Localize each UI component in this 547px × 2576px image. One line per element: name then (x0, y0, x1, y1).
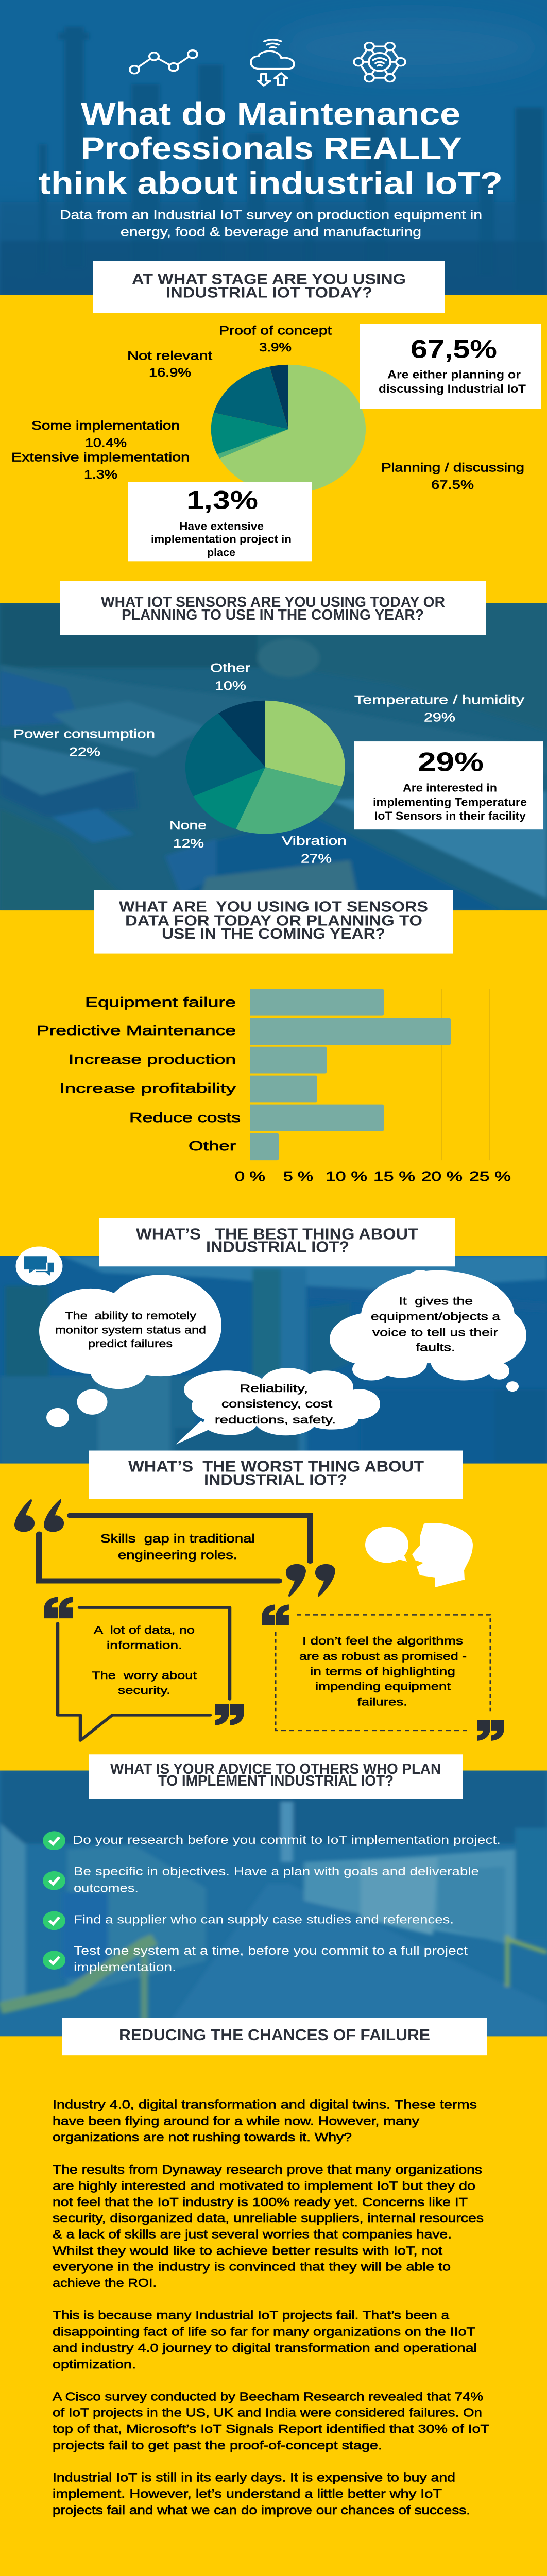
heading: sensor data use: DATA FOR TODAY OR PLANNING TO (125, 912, 422, 929)
pie labels: stage of use: 10.4% (85, 436, 127, 450)
paragraph 4: projects fail to get past the proof-of-concept stage. (53, 2439, 382, 2452)
callout: 1,3%: 1,3% (186, 485, 258, 514)
thought bubble: remote monitoring: predict failures (88, 1337, 173, 1350)
header icons (130, 40, 405, 86)
paragraph 2: everyone in the industry is convinced that they will be able to (53, 2260, 451, 2274)
paragraph 2: achieve the ROI. (53, 2277, 157, 2290)
heading: sensor data use (94, 890, 453, 954)
thought bubble: equipment voice: It gives the (399, 1295, 473, 1308)
paragraph 5 (53, 2471, 470, 2517)
quote: algorithms (262, 1604, 504, 1741)
heading: advice: WHAT IS YOUR ADVICE TO OTHERS WHO PLAN (110, 1761, 441, 1777)
pie labels: stage of use: 1.3% (84, 467, 117, 481)
callout: 67,5%: 67,5% (411, 334, 497, 363)
pie labels: IoT sensors: 27% (301, 852, 332, 866)
heading: sensor data use: WHAT ARE YOU USING IOT SENSORS (119, 899, 428, 915)
paragraph 2: are highly interested and motivated to implement IoT but they do (53, 2179, 475, 2193)
paragraph 2: & a lack of skills are just several worries that companies have. (53, 2228, 452, 2241)
item 1: Do your research before you commit to IoT implementation project. (73, 1834, 501, 1846)
quote: algorithms: in terms of highlighting (310, 1666, 455, 1678)
paragraph 4: A Cisco survey conducted by Beecham Research revealed that 74% (53, 2390, 483, 2403)
pie labels: stage of use: 16.9% (149, 365, 191, 380)
heading: advice: TO IMPLEMENT INDUSTRIAL IOT? (158, 1772, 394, 1789)
item 3: Find a supplier who can supply case studies and references. (74, 1913, 454, 1926)
callout: 67,5%: discussing Industrial IoT (379, 382, 526, 396)
callout: 29%: IoT Sensors in their facility (374, 809, 526, 822)
thought bubble: equipment voice: equipment/objects a (371, 1311, 501, 1323)
paragraph 2 (53, 2163, 484, 2290)
quote: data and security (44, 1597, 244, 1740)
axis labels: 20 % (421, 1169, 463, 1184)
quote: data and security: information. (107, 1639, 182, 1652)
pie labels: stage of use: 3.9% (259, 340, 292, 354)
quote: skills gap: Skills gap in traditional (100, 1532, 255, 1546)
heading: sensor data use: USE IN THE COMING YEAR? (162, 926, 385, 942)
pie labels: IoT sensors: 10% (215, 679, 246, 692)
callout: 1,3% (128, 482, 312, 561)
heading: best thing: INDUSTRIAL IOT? (206, 1239, 349, 1256)
subtitle: energy, food & beverage and manufacturing (121, 225, 421, 239)
item 3 (43, 1911, 454, 1930)
paragraph 1: have been flying around for a while now. However, many (53, 2114, 419, 2128)
quote: algorithms: are as robust as promised - (299, 1650, 467, 1663)
paragraph 5: implement. However, let’s understand a little better why IoT (53, 2487, 442, 2501)
title: Professionals REALLY (81, 131, 462, 166)
pie labels: IoT sensors: 12% (173, 836, 204, 851)
callout: 67,5%: Are either planning or (387, 368, 521, 381)
subtitle: Data from an Industrial IoT survey on production equipment in (60, 208, 482, 222)
thought bubble: equipment voice: faults. (416, 1342, 455, 1354)
paragraph 3: optimization. (53, 2358, 136, 2371)
speech bubble: reliability: Reliability, (240, 1382, 308, 1395)
heading: worst thing: INDUSTRIAL IOT? (204, 1471, 347, 1489)
section photo background: steel plant (0, 1256, 547, 1464)
paragraph 3: and industry 4.0 journey to digital transformation and operational (53, 2342, 477, 2355)
thought bubble: remote monitoring (39, 1275, 221, 1427)
axis labels: 10 % (326, 1169, 367, 1184)
pie labels: stage of use (11, 324, 524, 492)
quote: skills gap: engineering roles. (118, 1549, 237, 1562)
category labels (37, 995, 241, 1154)
callout: 67,5% (360, 324, 541, 409)
paragraph 5: projects fail and what we can do improve our chances of success. (53, 2504, 470, 2517)
pie chart: stage of use (211, 365, 366, 494)
pie labels: stage of use: Planning / discussing (381, 461, 524, 474)
paragraph 2: security, disorganized data, unreliable suppliers, internal resources (53, 2212, 484, 2225)
axis labels (235, 1169, 511, 1184)
item 4: implementation. (74, 1961, 176, 1974)
heading: stage of IIoT use: AT WHAT STAGE ARE YOU USING (132, 271, 406, 287)
speech bubble: reliability (176, 1368, 380, 1445)
icon: line chart (130, 50, 197, 74)
thought bubble: remote monitoring: monitor system status and (55, 1324, 206, 1336)
callout: 1,3%: Have extensive (179, 520, 264, 532)
item 2 (43, 1865, 479, 1895)
heading: IoT sensors (60, 581, 486, 635)
paragraph 1: organizations are not rushing towards it. Why? (53, 2131, 352, 2144)
item 4 (43, 1944, 468, 1974)
pie labels: IoT sensors: Vibration (282, 834, 347, 848)
heading: advice (89, 1754, 463, 1799)
icon: network hub (354, 43, 405, 82)
heading: reducing failure (62, 2018, 487, 2055)
paragraph 1 (53, 2098, 477, 2144)
icon: cloud with wifi and transfer arrows (251, 40, 294, 86)
category labels: Increase profitability (59, 1081, 236, 1096)
heading: best thing: WHAT’S THE BEST THING ABOUT (136, 1225, 418, 1243)
advice checklist (43, 1831, 501, 1974)
heading: IoT sensors: PLANNING TO USE IN THE COMING YEAR? (122, 606, 424, 623)
category labels: Predictive Maintenance (37, 1024, 236, 1039)
title (39, 97, 503, 201)
quote: algorithms: impending equipment (315, 1680, 451, 1693)
pie labels: IoT sensors: None (169, 818, 207, 833)
axis labels: 25 % (469, 1169, 511, 1184)
body text (53, 2098, 489, 2517)
callout: 29% (354, 741, 543, 829)
quote: algorithms: I don’t feel the algorithms (302, 1635, 463, 1647)
category labels: Equipment failure (85, 995, 236, 1010)
pie labels: IoT sensors: Power consumption (13, 727, 155, 741)
pie labels: IoT sensors: 22% (69, 745, 100, 759)
item 1 (43, 1831, 501, 1850)
axis labels: 0 % (235, 1169, 265, 1184)
section photo background: factory aisle (0, 1771, 547, 2036)
speech bubble: reliability: reductions, safety. (215, 1414, 336, 1426)
hero photo background: refinery (0, 0, 547, 295)
quote: data and security: The worry about (92, 1669, 197, 1682)
item 2: Be specific in objectives. Have a plan with goals and deliverable (74, 1865, 479, 1878)
title: think about industrial IoT? (39, 166, 503, 201)
quote: data and security: A lot of data, no (94, 1624, 195, 1637)
heading: best thing (99, 1218, 455, 1266)
bar chart: sensor data use (37, 989, 511, 1184)
callout: 29%: implementing Temperature (373, 795, 527, 809)
pie labels: IoT sensors: 29% (424, 710, 455, 724)
quote: algorithms: failures. (357, 1696, 407, 1708)
paragraph 3 (53, 2309, 477, 2371)
paragraph 3: disappointing fact of life so far for many organizations on the IIoT (53, 2325, 475, 2338)
heading: stage of IIoT use: INDUSTRIAL IOT TODAY? (166, 284, 372, 301)
callout: 1,3%: implementation project in (151, 533, 292, 545)
icon: speaking head (365, 1523, 473, 1587)
axis labels: 5 % (283, 1169, 313, 1184)
callout: 29%: 29% (418, 747, 484, 777)
callout: 29%: Are interested in (403, 782, 497, 794)
quote: data and security: security. (118, 1684, 170, 1697)
heading: worst thing: WHAT’S THE WORST THING ABOUT (128, 1458, 424, 1476)
title: What do Maintenance (81, 97, 460, 132)
speech bubble: reliability: consistency, cost (221, 1398, 332, 1410)
item 4: Test one system at a time, before you commit to a full project (74, 1944, 468, 1958)
heading: reducing failure: REDUCING THE CHANCES OF FAILURE (119, 2026, 430, 2044)
pie labels: stage of use: Not relevant (127, 349, 213, 363)
heading: worst thing (89, 1451, 463, 1499)
paragraph 2: The results from Dynaway research prove that many organizations (53, 2163, 482, 2177)
pie labels: IoT sensors: Temperature / humidity (354, 693, 525, 707)
pie labels: stage of use: Proof of concept (219, 324, 332, 337)
paragraph 1: Industry 4.0, digital transformation and digital twins. These terms (53, 2098, 477, 2111)
pie labels: stage of use: 67.5% (431, 478, 474, 492)
item 2: outcomes. (74, 1882, 139, 1895)
heading: IoT sensors: WHAT IOT SENSORS ARE YOU USING TODAY OR (101, 594, 445, 610)
bars (250, 989, 451, 1160)
paragraph 4: of IoT projects in the US, UK and India were considered failures. On (53, 2406, 482, 2419)
paragraph 4 (53, 2390, 489, 2452)
paragraph 4: top of that, Microsoft’s IoT Signals Report identified that 30% of IoT (53, 2422, 489, 2435)
pie chart: IoT sensors (185, 701, 345, 834)
category labels: Reduce costs (129, 1110, 241, 1125)
pie labels: IoT sensors: Other (210, 661, 250, 675)
thought bubble: equipment voice (330, 1270, 526, 1392)
paragraph 3: This is because many Industrial IoT projects fail. That’s been a (53, 2309, 450, 2322)
pie labels: stage of use: Some implementation (31, 418, 180, 432)
quote: skills gap (14, 1499, 335, 1597)
paragraph 2: Whilst they would like to achieve better results with IoT, not (53, 2245, 442, 2258)
thought bubble: remote monitoring: The ability to remotely (65, 1310, 197, 1321)
section photo background: aerial factory (0, 603, 547, 933)
subtitle (60, 208, 482, 239)
axis labels: 15 % (373, 1169, 415, 1184)
paragraph 2: not feel that the IoT industry is 100% ready yet. Concerns like IT (53, 2196, 468, 2209)
pie labels: IoT sensors (13, 661, 525, 866)
icon: chat bubbles (15, 1246, 63, 1285)
callout: 1,3%: place (207, 546, 235, 558)
paragraph 5: Industrial IoT is still in its early days. It is expensive to buy and (53, 2471, 455, 2484)
pie labels: stage of use: Extensive implementation (11, 450, 190, 464)
category labels: Other (189, 1139, 236, 1154)
category labels: Increase production (69, 1052, 236, 1067)
thought bubble: equipment voice: voice to tell us their (372, 1326, 498, 1339)
heading: stage of IIoT use (93, 261, 445, 313)
